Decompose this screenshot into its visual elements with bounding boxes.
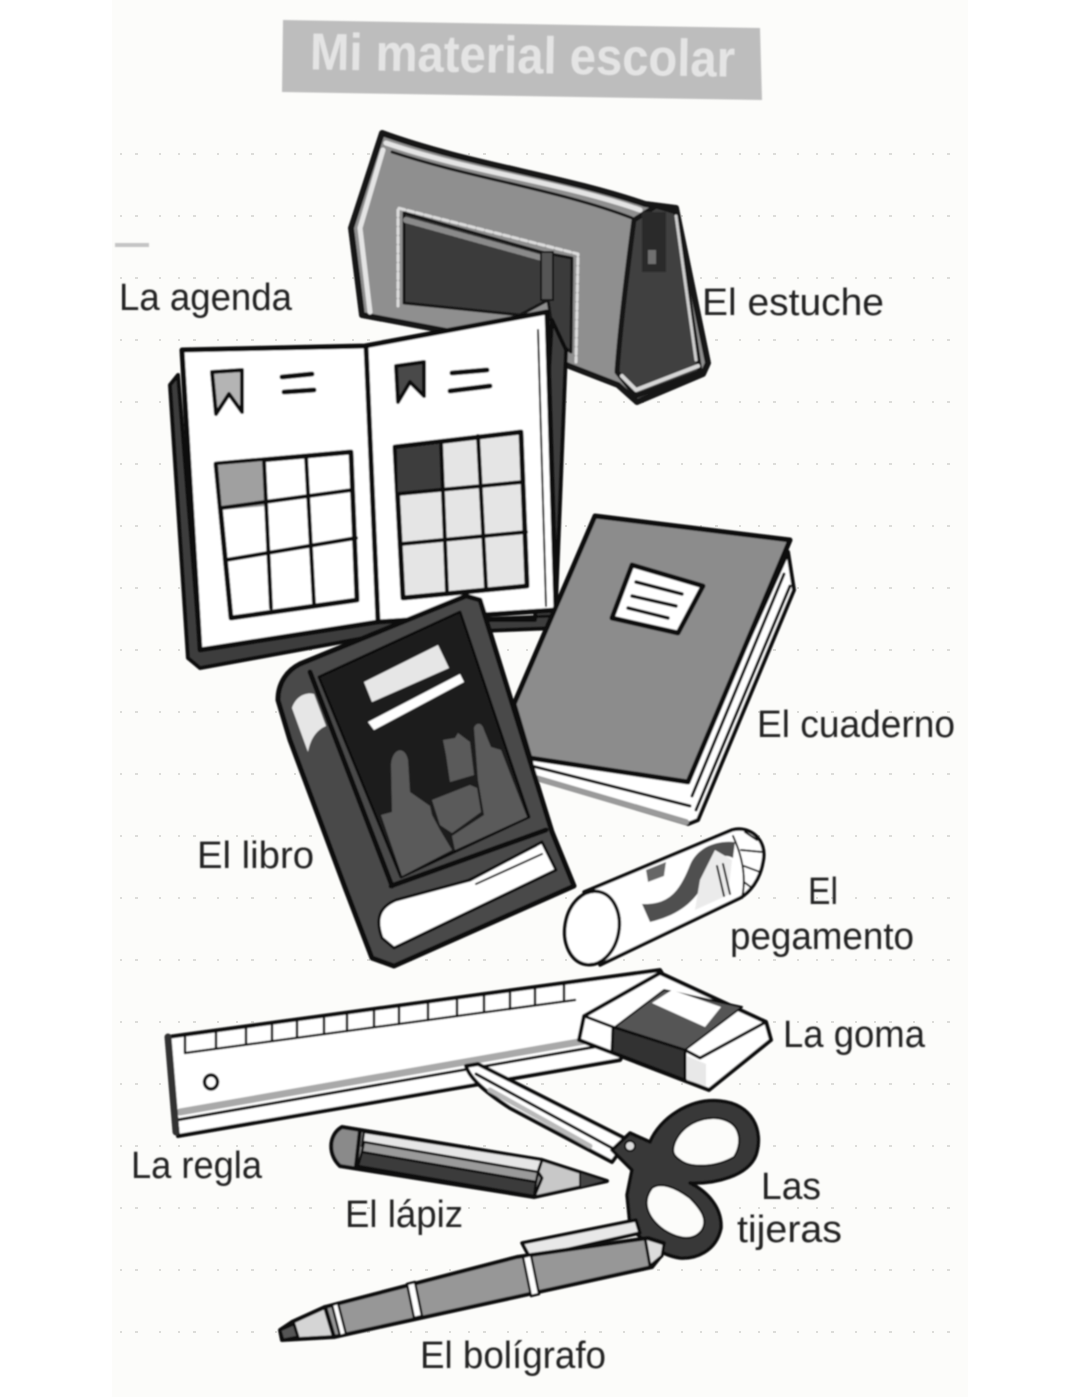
icon: book (el libro) bbox=[278, 596, 574, 966]
label: Las tijeras: Las bbox=[761, 1166, 821, 1208]
icon: notebook (el cuaderno) bbox=[514, 516, 794, 824]
label: La goma: La goma bbox=[783, 1014, 926, 1056]
book cover panel bbox=[319, 612, 529, 877]
label: Las tijeras: tijeras bbox=[737, 1209, 842, 1251]
label: El lápiz: El lápiz bbox=[345, 1194, 463, 1236]
label: La agenda: La agenda bbox=[119, 277, 293, 319]
label: El libro: El libro bbox=[197, 835, 314, 877]
left page grid bbox=[216, 452, 357, 618]
label: El estuche: El estuche bbox=[702, 282, 884, 324]
label: Las tijeras bbox=[737, 1166, 842, 1251]
zip pocket bbox=[398, 208, 578, 362]
label: La regla: La regla bbox=[131, 1145, 263, 1187]
icon: pen (el bolígrafo) bbox=[280, 1220, 664, 1340]
notebook label bbox=[612, 565, 703, 633]
icon: agenda bbox=[170, 312, 566, 668]
icon: glue stick (el pegamento) bbox=[559, 829, 764, 969]
right page grid bbox=[395, 432, 527, 598]
icon: eraser (la goma) bbox=[579, 973, 771, 1090]
label: El pegamento: El bbox=[808, 871, 838, 913]
icon: ruler (la regla) bbox=[168, 970, 665, 1136]
title banner: Mi material escolar bbox=[310, 23, 736, 89]
icon: scissors (las tijeras) bbox=[466, 1064, 758, 1258]
label: El pegamento: pegamento bbox=[730, 916, 914, 958]
mark: small smudge bbox=[115, 243, 149, 247]
bookmark icons and text lines bbox=[212, 362, 490, 414]
label: El cuaderno: El cuaderno bbox=[757, 704, 955, 746]
label: El bolígrafo: El bolígrafo bbox=[420, 1335, 606, 1377]
label: El pegamento bbox=[730, 871, 914, 958]
icon: pencil case (el estuche) bbox=[351, 133, 708, 402]
icon: pencil (el lápiz) bbox=[331, 1127, 607, 1197]
